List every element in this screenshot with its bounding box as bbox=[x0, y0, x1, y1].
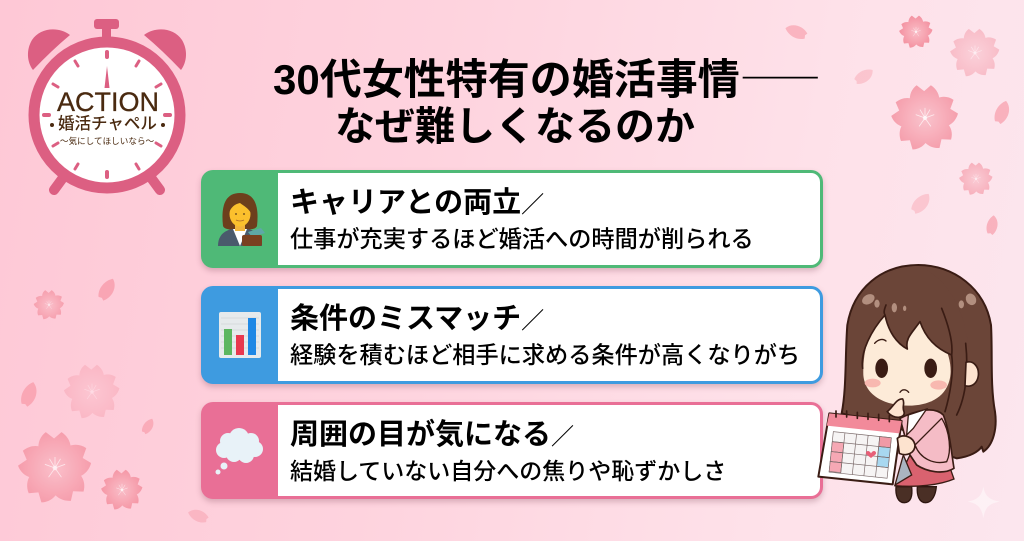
jacket bbox=[900, 410, 954, 472]
ear bbox=[965, 362, 978, 386]
title: なぜ難しくなるのか bbox=[335, 105, 695, 149]
icon: businesswoman bbox=[218, 193, 265, 246]
text: mismatch description: 経験を積むほど相手に求める条件が高くなりがち bbox=[290, 342, 800, 368]
calendar back page bbox=[895, 455, 912, 485]
heading: career: キャリアとの両立／ bbox=[290, 187, 544, 219]
sparkle bbox=[968, 487, 1000, 518]
hair highlights bbox=[860, 292, 978, 312]
holding hand bbox=[897, 436, 915, 455]
logo text: 婚活チャペル: 婚活チャペル bbox=[58, 115, 157, 133]
back hair bbox=[842, 265, 996, 458]
illustration: worried woman holding calendar bbox=[817, 264, 999, 517]
face bbox=[863, 312, 951, 406]
logo text: tagline: 〜気にしてほしいなら〜 bbox=[60, 136, 154, 146]
shoes bbox=[896, 487, 912, 503]
eyes bbox=[875, 359, 888, 378]
brow and mouth bbox=[875, 339, 909, 392]
blush bbox=[865, 379, 881, 387]
icon: thought cloud bbox=[216, 428, 263, 474]
heading: mismatch: 条件のミスマッチ／ bbox=[290, 303, 544, 335]
calendar bbox=[818, 411, 902, 484]
title: 30代女性特有の婚活事情—— bbox=[273, 46, 821, 105]
front hair bbox=[850, 266, 969, 412]
heading: surroundings: 周囲の目が気になる／ bbox=[290, 419, 574, 451]
panel: mismatch card bbox=[201, 286, 823, 384]
title bbox=[273, 46, 821, 149]
pointing hand bbox=[887, 399, 904, 417]
sleeve bbox=[915, 418, 949, 463]
bang strands bbox=[862, 305, 967, 415]
icon: bar chart bbox=[219, 312, 261, 358]
text: surroundings description: 結婚していない自分への焦りや恥ずかしさ bbox=[290, 458, 726, 484]
panel: career card bbox=[201, 170, 823, 268]
panel: surroundings card bbox=[201, 402, 823, 499]
text: career description: 仕事が充実するほど婚活への時間が削られる bbox=[290, 226, 754, 252]
logo: alarm clock badge bbox=[28, 19, 186, 195]
skirt bbox=[895, 455, 954, 486]
logo text: ACTION: ACTION bbox=[57, 87, 159, 117]
